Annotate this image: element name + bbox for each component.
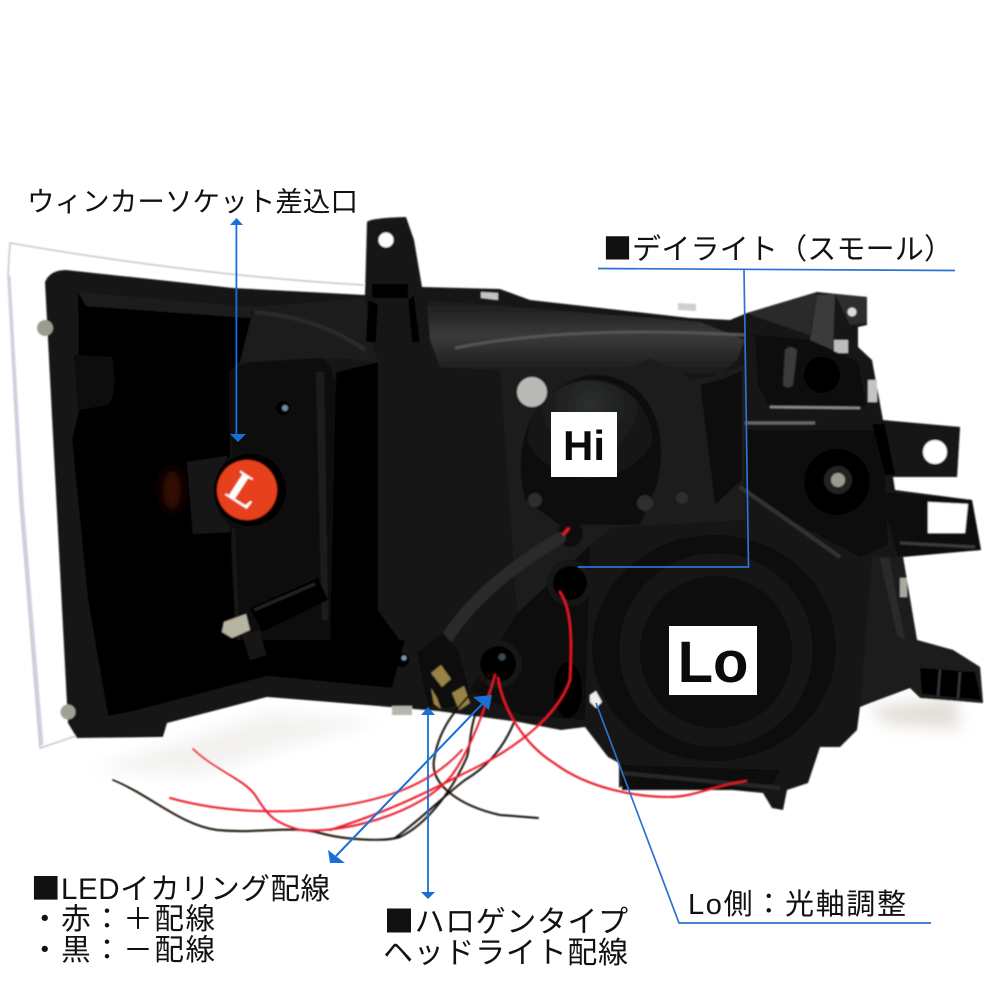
bolts xyxy=(528,492,688,511)
cable xyxy=(447,538,560,638)
right mount tab with hole xyxy=(872,423,960,477)
label: Lo side adjustment: Lo側：光軸調整 xyxy=(688,888,906,921)
label: daylight: ■デイライト（スモール） xyxy=(603,226,953,268)
label: LED ring wiring xyxy=(30,866,330,967)
label: turn signal socket: ウィンカーソケット差込口 xyxy=(27,186,358,217)
wire socket xyxy=(547,560,593,606)
high beam cap xyxy=(527,380,653,506)
low beam cap xyxy=(588,529,844,765)
Hi label xyxy=(551,412,617,477)
upper left housing ledge xyxy=(240,298,378,362)
wires xyxy=(113,592,746,840)
adjuster hole upper xyxy=(804,357,840,393)
high beam surround xyxy=(521,375,661,525)
lower black grommet xyxy=(554,662,582,718)
turn signal socket xyxy=(163,445,306,537)
label: black wire: ・黒：－配線 xyxy=(30,934,215,967)
Hi label: Hi xyxy=(563,422,605,469)
label: red wire: ・赤：＋配線 xyxy=(30,903,215,936)
floor shadow xyxy=(90,698,960,775)
lower retainer xyxy=(622,765,780,790)
leader: Lo adjuster xyxy=(596,703,931,923)
letter L: L xyxy=(219,462,270,519)
arrow: halogen wiring xyxy=(421,707,435,899)
adjuster tip xyxy=(590,691,602,708)
lower right bracket xyxy=(860,555,983,707)
right adjuster nut xyxy=(804,449,870,515)
label: halogen headlight wiring: ■ハロゲンタイプ xyxy=(384,897,628,941)
lamp mount panel xyxy=(500,358,745,613)
clear lens edge xyxy=(8,243,364,748)
small light knob xyxy=(517,377,547,407)
raised lamp panel xyxy=(229,358,336,640)
bulb xyxy=(222,578,328,660)
black gap beside panel xyxy=(330,362,400,640)
grommet xyxy=(474,640,522,688)
upper grommet xyxy=(557,521,583,547)
upper housing band xyxy=(427,300,745,380)
top right bracket xyxy=(747,292,817,335)
leader: daylight xyxy=(578,268,955,567)
central panel xyxy=(378,362,517,645)
headlight photo xyxy=(8,217,983,840)
mounting hole top xyxy=(378,232,394,248)
housing silhouette xyxy=(45,217,983,810)
label: halogen headlight wiring xyxy=(383,897,628,970)
connector xyxy=(417,633,470,710)
dark interior of turn signal compartment xyxy=(72,292,405,716)
label: LED ring wiring: ■LEDイカリング配線 xyxy=(31,866,330,908)
silver clips xyxy=(481,292,498,300)
Lo label: Lo xyxy=(678,630,748,695)
label: halogen headlight wiring: ヘッドライト配線 xyxy=(383,937,628,970)
arrow: turn signal socket xyxy=(230,218,246,442)
right panel xyxy=(745,430,888,557)
right lower tab xyxy=(880,492,981,556)
right upper recess with connector xyxy=(755,335,866,410)
compartment side flange xyxy=(74,355,114,410)
lower central panel xyxy=(470,545,590,720)
screws xyxy=(37,320,53,336)
arrow: LED ring wiring xyxy=(328,695,492,863)
